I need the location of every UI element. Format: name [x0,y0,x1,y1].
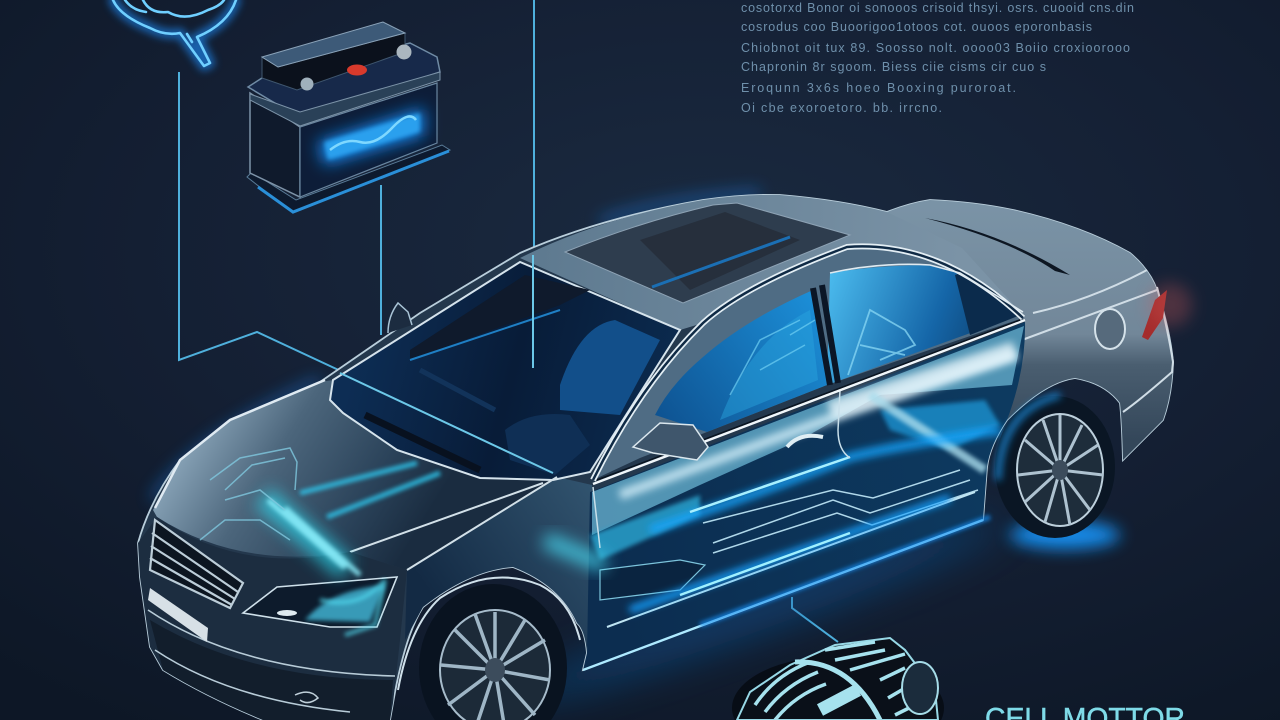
front wheel [398,577,580,720]
headlight [243,577,397,627]
hood engine glow [200,448,440,635]
door lower panels [583,322,1025,670]
front fascia [138,517,407,720]
lower bumper [148,610,395,720]
battery base plate [247,145,450,213]
description text block [741,1,1134,115]
icon: electric motor [732,638,944,720]
rear wheel [995,395,1120,549]
window surround band [593,246,1023,480]
connector bracket at battery line [388,303,412,333]
window trim [593,246,1023,480]
car [138,193,1192,720]
door handle [787,436,823,447]
battery glowing label [318,108,424,165]
side mirror [633,423,708,460]
sill lines [607,492,975,627]
terminals [300,78,314,90]
taillight [1142,290,1167,340]
rear quarter and trunk [887,200,1173,460]
icon: glowing brain [113,0,236,66]
hood crease lines [350,477,557,570]
description text block: Chiobnot oit tux 89. Soosso nolt. oooo03 Boiio croxioorooo [741,41,1130,55]
battery case left [250,93,300,197]
hood [153,380,557,570]
car body [138,195,1173,720]
fuel cap [1095,309,1125,349]
roof panel [520,195,1023,330]
battery base glow edge [258,151,449,212]
windshield [330,262,680,480]
motor pulley [902,662,938,714]
shoulder highlights [1022,270,1173,412]
taillight glow [1148,283,1192,327]
floor ribs [703,470,978,553]
license plate [148,588,208,642]
edge glow [153,193,760,500]
icon: car battery [247,22,450,213]
battery lid [248,43,440,118]
connector lines [179,0,838,642]
description text block: Oi cbe exoroetoro. bb. irrcno. [741,101,942,115]
main energy line [650,430,1000,530]
fender glow [545,540,605,565]
belt line [593,320,1025,484]
front side window [655,290,827,432]
description text block: cosrodus coo Buoorigoo1otoos cot. ouoos eporonbasis [741,20,1092,34]
description text block: Eroqunn 3x6s hoeo Booxing puroroat. [741,81,1016,95]
hood top edge highlight [155,380,325,508]
floor glow under car [509,502,1011,718]
sunroof [565,203,850,303]
fender [405,477,592,653]
battery top block [262,33,405,90]
description text block: cosotorxd Bonor oi sonooos crisoid thsyi. osrs. cuooid cns.din [741,1,1134,15]
grille [150,520,243,608]
connector lines over windshield [340,255,553,473]
rear side window [827,265,1023,385]
spoiler slot [925,218,1070,275]
description text block: Chapronin 8r sgoom. Biess ciie cisms cir cuo s [741,60,1046,74]
battery case front [300,83,437,197]
